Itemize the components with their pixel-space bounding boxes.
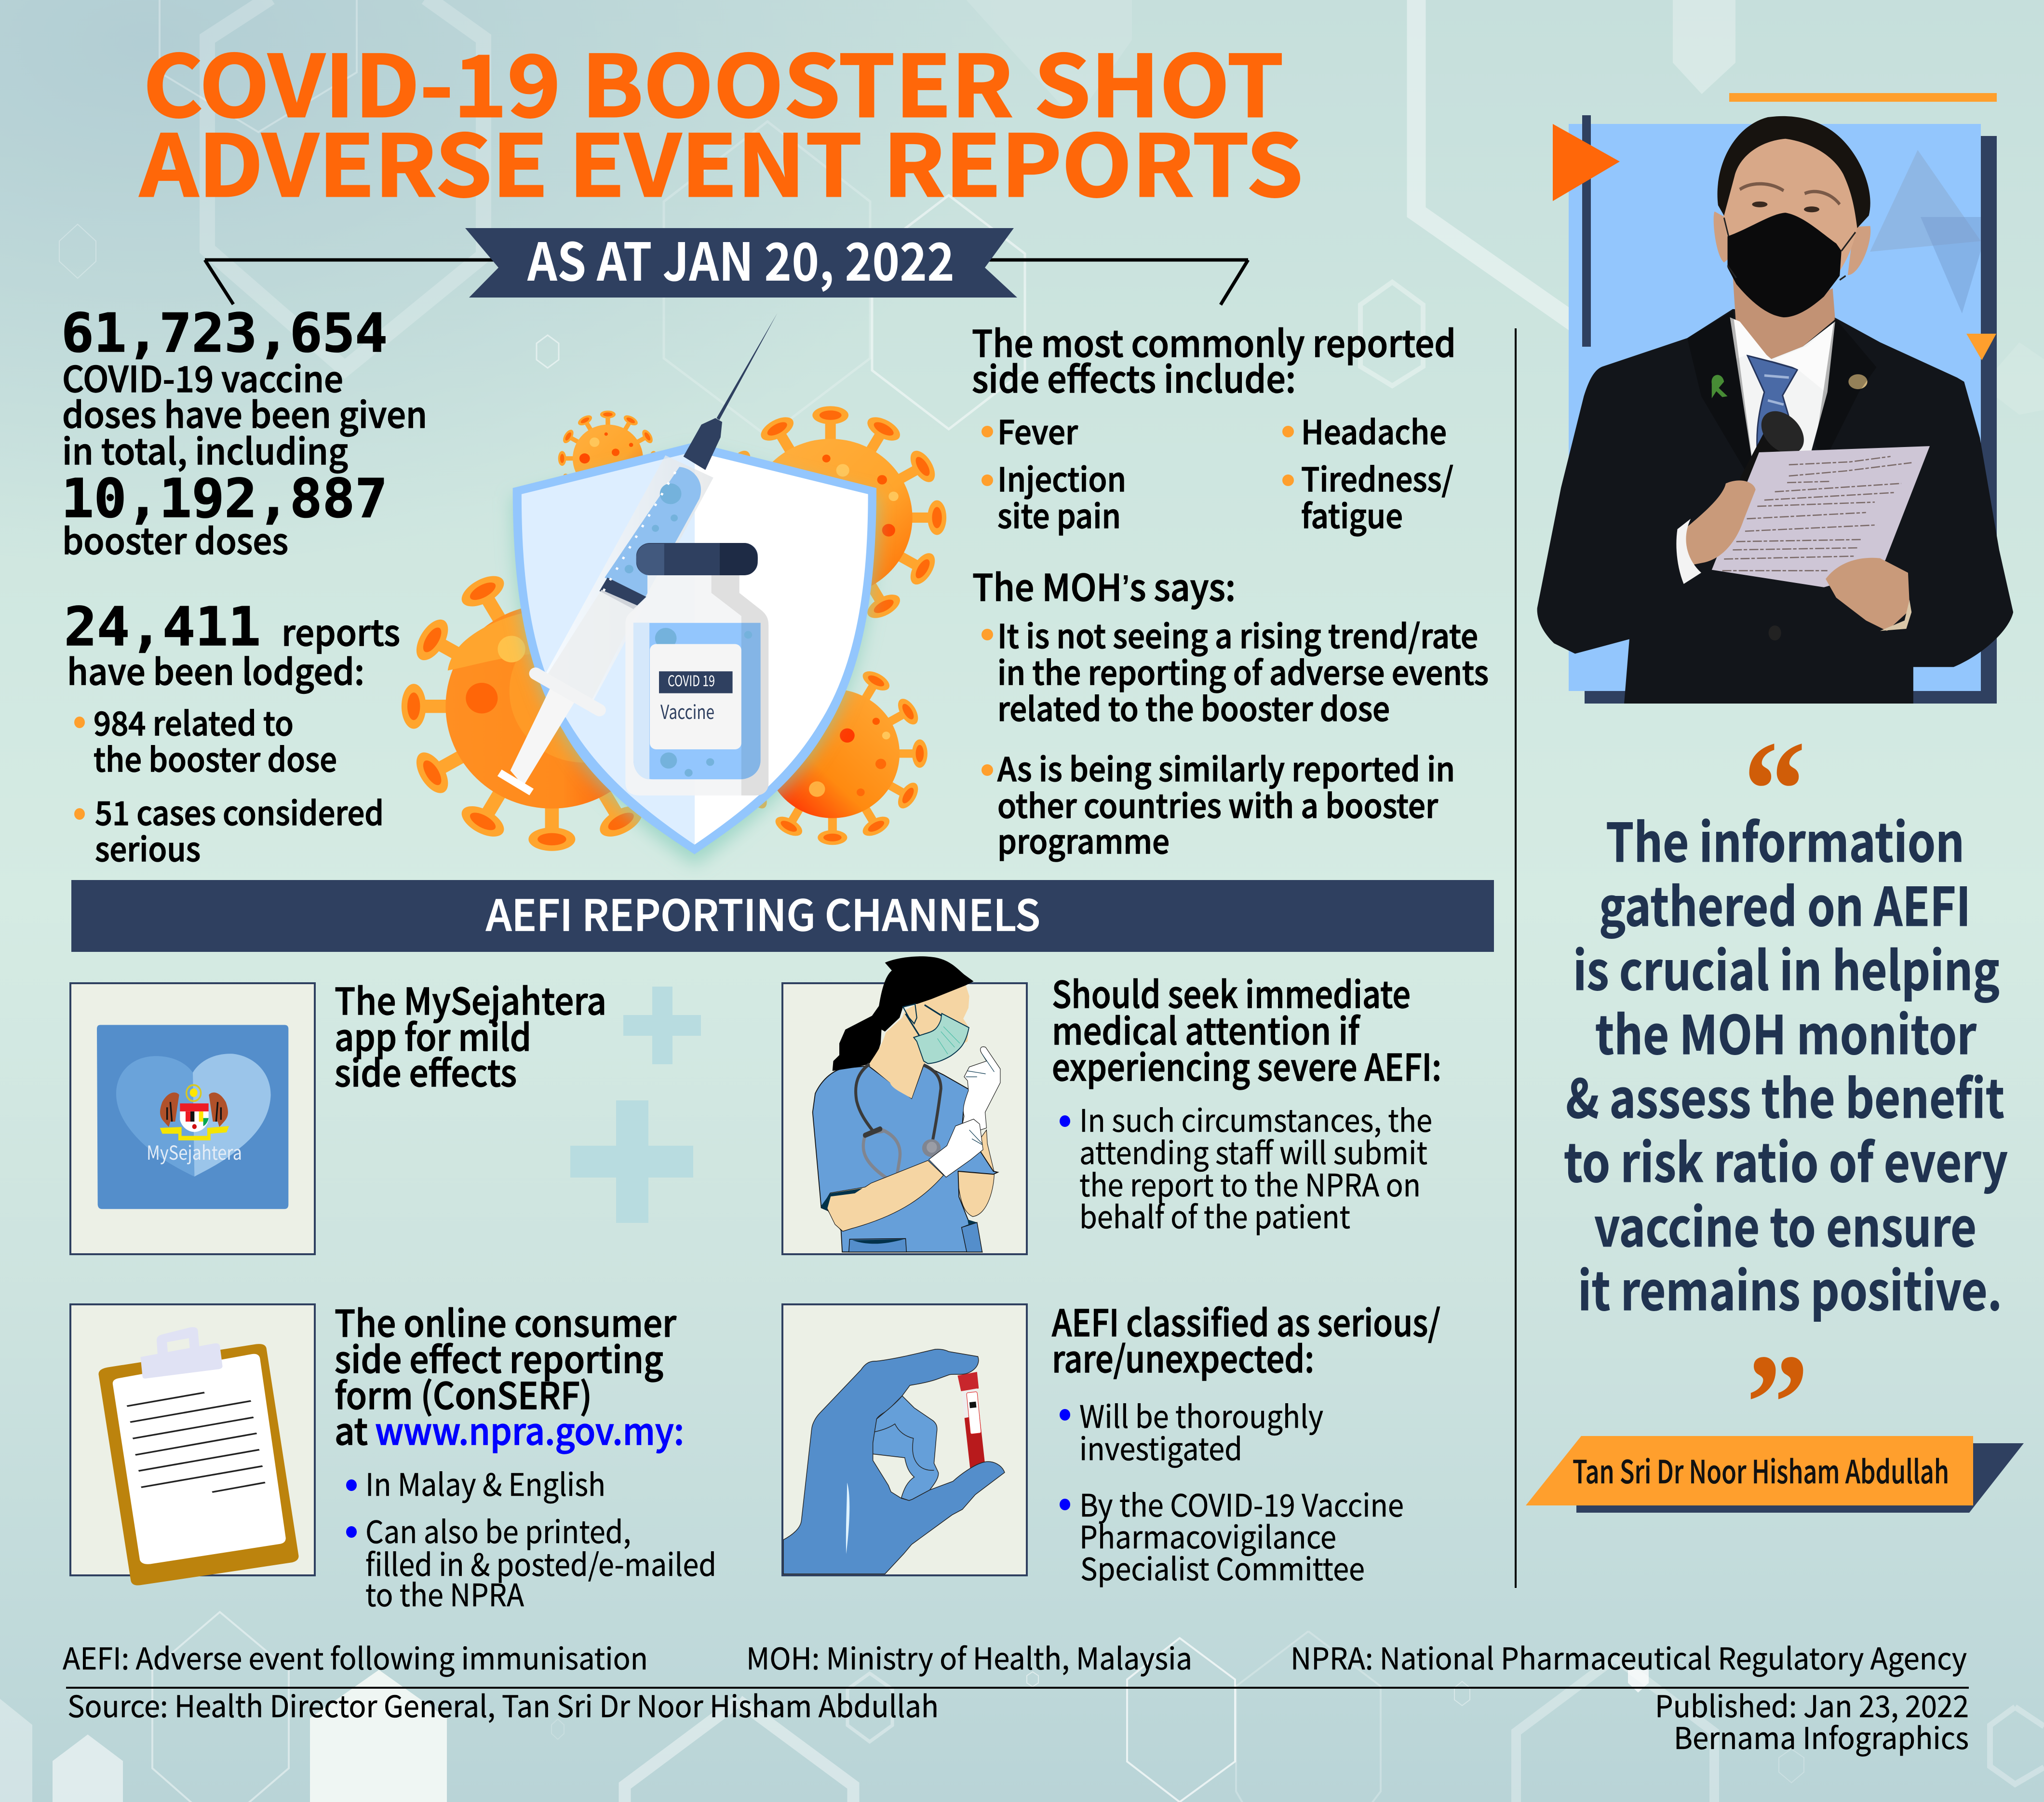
syringe <box>499 313 777 792</box>
footer source and credits: Published: Jan 23, 2022 <box>1655 1682 1969 1726</box>
card: ConSERF online form <box>70 1294 716 1615</box>
side effects list: Fever <box>997 406 1078 454</box>
shield <box>513 442 876 866</box>
text: serious AEFI: AEFI classified as serious/ <box>1052 1294 1440 1347</box>
section band: AEFI reporting channels <box>71 880 1494 952</box>
side effects list: Injection <box>997 453 1126 501</box>
text: severe AEFI: medical attention if <box>1052 1002 1360 1055</box>
left panel: dose totals: in total, including <box>62 423 348 475</box>
left panel: reports lodged: serious <box>95 823 201 871</box>
closing quotation mark: ” <box>1746 1326 1809 1480</box>
text: ConSERF: filled in & posted/e-mailed <box>365 1541 716 1585</box>
side effects list: Tiredness/ <box>1301 453 1453 501</box>
quote: the MOH monitor <box>1595 992 1977 1070</box>
text: ConSERF: form (ConSERF) <box>335 1367 592 1420</box>
icon: clipboard <box>98 1327 299 1585</box>
side effects list: The most commonly reported <box>972 314 1456 367</box>
left panel: dose totals <box>61 302 427 565</box>
icon: nurse putting on gloves <box>813 956 1000 1252</box>
text: ConSERF: www.npra.gov.my: <box>375 1402 684 1455</box>
MOH statement: programme <box>997 815 1170 863</box>
text: serious AEFI: rare/unexpected: <box>1052 1330 1314 1383</box>
side effects list: side effects include: <box>972 350 1296 403</box>
MOH statement: in the reporting of adverse events <box>997 647 1489 694</box>
MOH statement: It is not seeing a rising trend/rate <box>997 610 1478 658</box>
virus: top right <box>714 406 946 629</box>
card: MySejahtera app: MySejahtera <box>147 1138 242 1165</box>
text: ConSERF: The online consumer <box>335 1294 677 1347</box>
opening quotation mark: “ <box>1743 712 1806 867</box>
vial label text: COVID 19 <box>668 669 715 691</box>
left panel: reports lodged: reports <box>282 605 400 656</box>
left panel: reports lodged <box>64 596 400 871</box>
left panel: reports lodged: have been lodged: <box>67 644 364 695</box>
footer source and credits: Source: Health Director General, Tan Sri Dr Noor Hisham Abdullah <box>67 1682 939 1726</box>
side effects list: Headache <box>1301 406 1447 454</box>
virus: small top left <box>558 410 658 506</box>
text: serious AEFI: investigated <box>1079 1425 1242 1469</box>
text: serious AEFI: Pharmacovigilance <box>1079 1513 1336 1558</box>
footer glossary: AEFI: Adverse event following immunisation <box>63 1635 648 1678</box>
text: MySejahtera: side effects <box>335 1044 517 1097</box>
text: serious AEFI: By the COVID-19 Vaccine <box>1079 1481 1404 1526</box>
icon: MySejahtera app <box>97 1025 288 1209</box>
MOH statement <box>972 558 1489 863</box>
quote: The information <box>1606 800 1964 877</box>
text: ConSERF: to the NPRA <box>365 1571 524 1615</box>
column divider <box>1515 328 1517 1588</box>
man in black suit <box>1537 116 2013 704</box>
text: ConSERF: In Malay & English <box>365 1461 605 1505</box>
text: ConSERF: at <box>335 1402 368 1455</box>
card: MySejahtera app <box>70 972 606 1254</box>
text: ConSERF: side effect reporting <box>335 1330 663 1383</box>
MOH statement: As is being similarly reported in <box>997 743 1455 791</box>
text: severe AEFI: the report to the NPRA on <box>1079 1161 1421 1206</box>
left panel: reports lodged: 51 cases considered <box>95 787 384 835</box>
title: COVID-19 BOOSTER SHOT <box>143 18 1284 141</box>
text: severe AEFI: In such circumstances, the <box>1079 1097 1432 1141</box>
virus: bottom right <box>738 662 928 845</box>
icon: gloved hand holding blood tube <box>783 1349 1005 1574</box>
vial label text <box>660 669 715 725</box>
text: serious AEFI: Specialist Committee <box>1080 1545 1365 1589</box>
text: severe AEFI: behalf of the patient <box>1079 1193 1350 1237</box>
left panel: reports lodged: 984 related to <box>94 697 294 745</box>
quote <box>1564 712 2008 1480</box>
title <box>139 18 1303 221</box>
left panel: dose totals: COVID-19 vaccine <box>62 351 343 403</box>
MOH statement: other countries with a booster <box>997 780 1438 827</box>
vaccine vial <box>625 543 768 796</box>
side effects list: site pain <box>997 490 1121 538</box>
MOH statement: The MOH’s says: <box>972 558 1236 611</box>
quote: vaccine to ensure <box>1594 1185 1977 1262</box>
name banner <box>1526 1436 2024 1513</box>
quote: gathered on AEFI <box>1599 864 1971 941</box>
virus: bottom left large <box>402 562 702 851</box>
left panel: dose totals: booster doses <box>62 513 288 565</box>
left panel: dose totals: 10,192,887 <box>61 468 388 530</box>
left panel: dose totals: 61,723,654 <box>61 302 388 365</box>
photo panel: Health Director General <box>1537 93 2013 704</box>
MOH statement: related to the booster dose <box>997 683 1390 731</box>
left panel: dose totals: doses have been given <box>62 387 427 438</box>
text: MySejahtera: The MySejahtera <box>335 972 606 1025</box>
text: MySejahtera <box>335 972 606 1097</box>
vaccine shield illustration <box>402 313 946 866</box>
footer glossary <box>63 1635 1967 1678</box>
decorative plus marks <box>570 987 701 1223</box>
footer glossary: MOH: Ministry of Health, Malaysia <box>746 1635 1192 1678</box>
vial label text: Vaccine <box>660 697 714 725</box>
side effects list: fatigue <box>1301 490 1403 538</box>
text: serious AEFI <box>1052 1294 1440 1589</box>
date ribbon with bracket lines: AS AT JAN 20, 2022 <box>527 221 955 296</box>
card: serious AEFI <box>782 1294 1440 1589</box>
text: severe AEFI <box>1052 965 1441 1237</box>
text: ConSERF: Can also be printed, <box>365 1508 631 1552</box>
footer source and credits: Bernama Infographics <box>1674 1714 1969 1758</box>
card: severe AEFI <box>782 956 1441 1254</box>
left panel: reports lodged: the booster dose <box>94 733 337 781</box>
text: serious AEFI: Will be thoroughly <box>1079 1393 1323 1437</box>
title: ADVERSE EVENT REPORTS <box>139 98 1303 221</box>
footer source and credits <box>67 1682 1969 1758</box>
left panel: reports lodged: 24,411 <box>64 596 261 658</box>
text: ConSERF <box>335 1294 716 1615</box>
date ribbon with bracket lines <box>205 221 1248 305</box>
footer glossary: NPRA: National Pharmaceutical Regulatory Agency <box>1291 1635 1967 1678</box>
text: severe AEFI: attending staff will submit <box>1079 1129 1427 1173</box>
text: severe AEFI: experiencing severe AEFI: <box>1052 1038 1441 1091</box>
section band: AEFI reporting channels: AEFI REPORTING CHANNELS <box>486 882 1040 943</box>
side effects list <box>972 314 1456 538</box>
text: severe AEFI: Should seek immediate <box>1052 965 1411 1018</box>
text: MySejahtera: app for mild <box>335 1008 531 1061</box>
